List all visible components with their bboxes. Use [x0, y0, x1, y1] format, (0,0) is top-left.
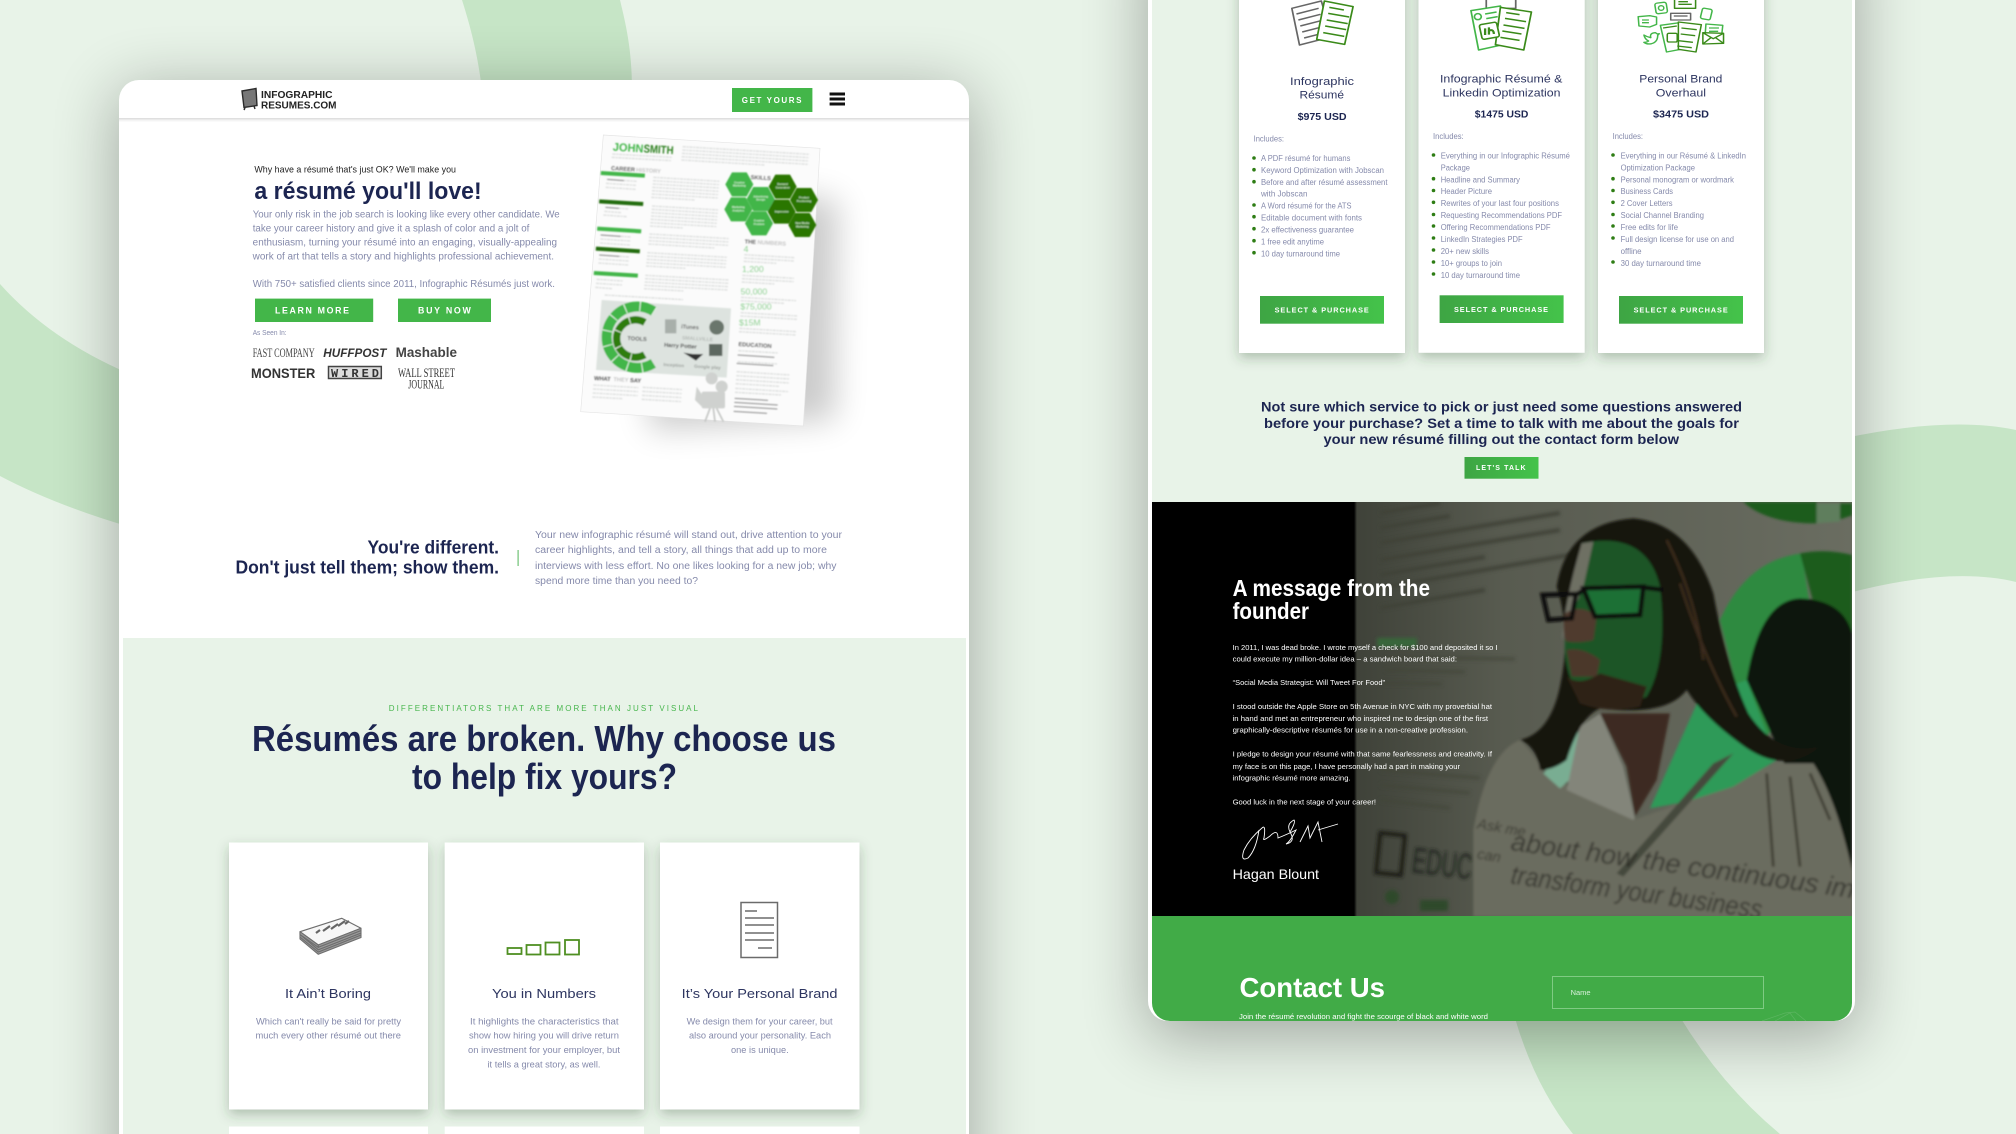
button: let's talk: [1464, 457, 1538, 479]
panel: why choose us section: [123, 638, 966, 1134]
features list: A PDF résumé for humans: [1261, 154, 1350, 163]
resume hexagon skills chart: [724, 172, 818, 237]
resume project logos: Google play: [694, 364, 721, 370]
heading: message from the founder: founder: [1233, 598, 1309, 624]
features list: Editable document with fonts: [1261, 214, 1362, 222]
as seen in logos: As Seen In:: [253, 330, 287, 337]
resume numbers: [739, 244, 772, 327]
signature: [1243, 820, 1338, 859]
input: name: [1552, 976, 1764, 1008]
resume hexagon skills chart: Positioning: [797, 199, 812, 203]
shirt lettering: can: [1476, 847, 1502, 866]
resume tools ring chart: TOOLS: [627, 336, 647, 343]
resume headings: CAREER: [611, 166, 635, 173]
features list: 10+ groups to join: [1441, 259, 1502, 268]
resume projects panel: [596, 300, 731, 378]
second row of cards: [229, 1126, 860, 1134]
features list: [1432, 152, 1570, 280]
founder name: Hagan Blount: [1233, 866, 1319, 882]
shirt lettering: about how the continuous im: [1509, 826, 1857, 904]
features list: Package: [1441, 164, 1470, 172]
resume hexagon skills chart: Impressive: [775, 210, 789, 214]
resume name: JOHN: [612, 142, 644, 156]
resume project logos: SMALLVILLE: [682, 335, 714, 343]
features list: Rewrites of your last four positions: [1441, 199, 1559, 208]
resume headings: SKILLS: [751, 175, 771, 182]
as seen in logos: FAST COMPANY: [253, 345, 315, 360]
input: name: Name: [1571, 990, 1591, 997]
resume shadow: [640, 180, 838, 430]
pricing card: personal brand overhaul: Personal Brand: [1639, 73, 1722, 85]
text: new infographic resume: interviews with less effort. No one likes looking for a new job; why: [535, 561, 836, 572]
resume hexagon skills chart: Demand: [777, 182, 788, 186]
resume project logos: Harry Potter: [664, 343, 698, 351]
features list: Offering Recommendations PDF: [1441, 223, 1551, 232]
resume headings: NUMBERS: [757, 240, 786, 248]
icon: resumes with linkedin: [1471, 0, 1531, 50]
panel: left website screenshot: [119, 80, 969, 1134]
card: you in numbers: You in Numbers: [492, 986, 597, 1001]
card: it's your personal brand: It’s Your Personal Brand: [682, 986, 838, 1001]
heading: contact us: Contact Us: [1240, 972, 1385, 1003]
pricing card: infographic resume: Includes:: [1254, 135, 1284, 144]
card: you in numbers: It highlights the characteristics that: [470, 1016, 619, 1026]
resume numbers: $15M: [739, 317, 761, 327]
resume numbers: 4: [744, 244, 749, 254]
features list: Headline and Summary: [1441, 176, 1520, 184]
card: it ain't boring: much every other résumé out there: [256, 1031, 401, 1041]
hero text: enthusiasm, turning your résumé into an engaging, visually-appealing: [253, 237, 557, 248]
icon: growing boxes: [508, 940, 579, 954]
panel: contact us: [1152, 916, 1852, 1021]
resume headings: HISTORY: [636, 168, 661, 175]
shadow on wall: [1746, 597, 1852, 868]
resume film camera: [695, 372, 728, 422]
features list: Before and after résumé assessment: [1261, 178, 1388, 187]
card: it's your personal brand: We design them for your career, but: [687, 1016, 833, 1026]
icon: logo document: [242, 88, 257, 110]
card: it's your personal brand: one is unique.: [731, 1045, 789, 1055]
heading: you're different: Don't just tell them; show them.: [236, 558, 499, 578]
founder photo: [1354, 502, 1857, 925]
card: it's your personal brand: [660, 842, 860, 1110]
features list: with Jobscan: [1260, 190, 1308, 198]
features list: Requesting Recommendations PDF: [1441, 211, 1562, 220]
pricing card: infographic resume and linkedin: Infographic Résumé &: [1440, 73, 1563, 85]
resume date bars: [594, 171, 645, 278]
button: [1260, 296, 1384, 324]
features list: 10 day turnaround time: [1261, 250, 1340, 258]
button: [1440, 295, 1564, 323]
features list: Everything in our Infographic Résumé: [1441, 152, 1570, 160]
logo: RESUMES.COM: [261, 101, 336, 112]
resume headings: THEY: [613, 377, 629, 384]
pricing card: infographic resume and linkedin: Linkedin Optimization: [1443, 87, 1560, 99]
pricing card: personal brand overhaul: $3475 USD: [1653, 108, 1709, 120]
resume hexagon skills chart: Creative: [754, 219, 765, 223]
resume numbers: 1,200: [742, 264, 764, 274]
resume hexagon skills chart: Marketing: [796, 224, 809, 228]
wall lettering: EDUC: [1410, 839, 1475, 887]
pricing card: personal brand overhaul: Overhaul: [1656, 87, 1706, 99]
features list: Keyword Optimization with Jobscan: [1261, 166, 1384, 175]
resume hexagon skills chart: New Media: [795, 221, 810, 225]
shirt lettering: Ask me: [1475, 816, 1527, 841]
button: get yours: [732, 88, 812, 112]
founder letter: [1233, 643, 1498, 807]
founder letter: infographic résumé more amazing.: [1233, 774, 1351, 783]
text: new infographic resume: Your new infographic résumé will stand out, drive attention to your: [535, 530, 843, 541]
resume hexagon skills chart: Marketing: [732, 205, 745, 209]
hero text: Your only risk in the job search is looking like every other candidate. We: [253, 210, 560, 220]
card: it ain't boring: [229, 842, 428, 1110]
founder letter: I pledge to design your résumé with that same fearlessness and creativity. If: [1233, 750, 1493, 759]
button: learn more: [255, 299, 373, 322]
features list: Everything in our Résumé & LinkedIn: [1621, 152, 1746, 160]
button: get yours: GET YOURS: [742, 96, 802, 105]
founder letter: “Social Media Strategist: Will Tweet For Food”: [1233, 678, 1386, 687]
contact intro text: Join the résumé revolution and fight the scourge of black and white word: [1239, 1012, 1488, 1021]
resume name: [612, 142, 674, 157]
resume headings: EDUCATION: [738, 342, 772, 350]
button: buy now: BUY NOW: [418, 306, 471, 316]
icon: social media bundle: [1638, 0, 1724, 52]
faint mountain mark: [1762, 1012, 1806, 1021]
features list: 20+ new skills: [1441, 247, 1489, 256]
as seen in logos: [251, 330, 457, 392]
features list: A Word résumé for the ATS: [1261, 202, 1352, 210]
button: SELECT & PURCHASE: [1454, 305, 1548, 314]
resume tools ring chart: [607, 307, 654, 368]
features list: Social Channel Branding: [1621, 211, 1704, 220]
features list: Optimization Package: [1621, 164, 1695, 172]
resume numbers: 50,000: [741, 286, 767, 296]
resume headings: WHAT: [594, 376, 611, 383]
hero text: take your career history and give it a splash of color and a jolt of: [253, 223, 530, 234]
heading: not sure which service: Not sure which service to pick or just need some questions answered: [1261, 399, 1742, 415]
pricing card: infographic resume: Infographic: [1290, 76, 1355, 88]
resume hexagon skills chart: Design: [756, 198, 765, 202]
card: it ain't boring: It Ain’t Boring: [285, 986, 371, 1001]
heading: resumes are broken: to help fix yours?: [412, 756, 677, 797]
as seen in logos: WIRED: [331, 367, 379, 381]
features list: 2 Cover Letters: [1621, 199, 1673, 208]
heading: resumes are broken: [252, 718, 836, 797]
wall lettering: [1372, 502, 1568, 912]
button: [1619, 296, 1743, 324]
resume headings: PROJECTS: [666, 311, 697, 319]
resume numbers: $75,000: [740, 302, 772, 312]
features list: Header Picture: [1441, 187, 1492, 196]
hair: [1520, 518, 1820, 770]
as seen in logos: Mashable: [396, 344, 457, 360]
card: you in numbers: it tells a great story, as well.: [488, 1059, 600, 1069]
heading: not sure which service: [1261, 399, 1742, 447]
hero text: Why have a résumé that's just OK? We'll make you: [254, 164, 456, 174]
text: new infographic resume: [535, 530, 843, 587]
hero text: With 750+ satisfied clients since 2011, Infographic Résumés just work.: [253, 279, 555, 290]
panel: founder message: [1152, 502, 1857, 925]
heading: resumes are broken: Résumés are broken. Why choose us: [252, 718, 836, 759]
features list: 10 day turnaround time: [1441, 271, 1520, 280]
features list: LinkedIn Strategies PDF: [1441, 235, 1523, 244]
button: SELECT & PURCHASE: [1634, 305, 1728, 314]
shirt: [1473, 740, 1852, 917]
resume hexagon skills chart: Advertising: [753, 194, 768, 198]
text: new infographic resume: career highlights, and tell a story, all things that add up to more: [535, 545, 827, 556]
founder letter: in hand and met an entrepreneur who inspired me to design one of the first: [1233, 714, 1488, 723]
founder letter: In 2011, I was dead broke. I wrote myself a check for $100 and deposited it so I: [1233, 643, 1498, 652]
founder letter: my face is on this page, I have personally had a part in making your: [1233, 762, 1461, 771]
as seen in logos: MONSTER: [251, 365, 315, 381]
as seen in logos: WALL STREET: [398, 365, 455, 380]
pricing card: personal brand overhaul: Includes:: [1613, 132, 1643, 141]
logo: [242, 88, 336, 112]
features list: [1252, 154, 1388, 258]
pricing card: infographic resume: [1239, 0, 1405, 353]
resume paper: [581, 135, 820, 426]
card: you in numbers: show how hiring you will drive return: [469, 1031, 619, 1041]
pricing card: personal brand overhaul: [1598, 0, 1764, 353]
logo: INFOGRAPHIC: [261, 90, 332, 101]
resume text lines: [592, 147, 809, 402]
button: SELECT & PURCHASE: [1275, 305, 1369, 314]
heading: you're different: [236, 538, 499, 578]
features list: 30 day turnaround time: [1621, 259, 1701, 268]
heading: message from the founder: [1232, 579, 1430, 619]
resume project logos: iTunes: [681, 324, 699, 331]
resume project logos: Inception: [663, 362, 684, 368]
pricing card: infographic resume and linkedin: [1418, 0, 1585, 353]
pricing card: infographic resume and linkedin: Includes:: [1433, 132, 1464, 141]
heading: message from the founder: A message from the: [1233, 575, 1430, 601]
resume hexagon skills chart: Analytics: [732, 208, 745, 212]
icon: resume stack: [300, 918, 361, 954]
eyebrow: DIFFERENTIATORS THAT ARE MORE THAN JUST VISUAL: [389, 704, 699, 713]
button: buy now: [398, 299, 491, 322]
card: it ain't boring: Which can't really be said for pretty: [256, 1016, 402, 1026]
text: new infographic resume: spend more time than you need to?: [535, 576, 698, 587]
resume name: SMITH: [643, 143, 674, 157]
differentiator intro: [236, 530, 843, 587]
heading: not sure which service: before your purchase? Set a time to talk with me about the goals for: [1264, 415, 1740, 431]
glasses: [1543, 587, 1663, 620]
features list: Business Cards: [1621, 187, 1673, 196]
heading: you're different: You're different.: [368, 538, 499, 558]
founder letter: I stood outside the Apple Store on 5th Avenue in NYC with my proverbial hat: [1233, 702, 1492, 711]
button: learn more: LEARN MORE: [275, 306, 349, 316]
features list: Full design license for use on and: [1621, 235, 1734, 244]
resume hexagon skills chart: Marketing: [733, 184, 746, 188]
heading: not sure which service: your new résumé filling out the contact form below: [1324, 431, 1679, 447]
features list: 2x effectiveness guarantee: [1261, 226, 1354, 234]
resume project logos: [663, 319, 724, 370]
resume hexagon skills chart: Generation: [776, 185, 790, 189]
features list: [1611, 152, 1746, 268]
features list: 1 free edit anytime: [1261, 238, 1324, 246]
hero text: a résumé you'll love!: [254, 178, 482, 205]
hero text: [252, 164, 560, 290]
founder letter: Good luck in the next stage of your career!: [1233, 798, 1376, 807]
shirt lettering: transform your business: [1509, 860, 1764, 925]
card: it's your personal brand: also around your personality. Each: [689, 1031, 831, 1041]
features list: offline: [1621, 247, 1642, 256]
icon: hamburger menu: [830, 92, 845, 106]
resume hexagon skills chart: Problem: [754, 222, 765, 226]
resume headings: THE: [745, 239, 756, 246]
pricing card: infographic resume: Résumé: [1300, 90, 1344, 102]
icon: two resumes: [1292, 1, 1353, 45]
face: [1565, 541, 1662, 705]
resume hexagon skills chart: Product: [799, 196, 809, 200]
panel: right website screenshot: [1148, 0, 1857, 1021]
pricing card: infographic resume and linkedin: $1475 USD: [1475, 108, 1529, 120]
features list: Personal monogram or wordmark: [1621, 176, 1734, 184]
icon: document: [741, 902, 778, 958]
hero text: work of art that tells a story and highlights professional achievement.: [252, 251, 554, 262]
card: you in numbers: [445, 842, 644, 1110]
resume headings: [594, 166, 786, 385]
resume headings: SAY: [630, 378, 642, 385]
founder letter: could execute my million-dollar idea – a sandwich board that said:: [1233, 655, 1457, 664]
sample resume illustration: [581, 135, 838, 430]
as seen in logos: JOURNAL: [408, 377, 444, 392]
card: you in numbers: on investment for your employer, but: [468, 1045, 621, 1055]
as seen in logos: HUFFPOST: [323, 348, 387, 360]
pricing card: infographic resume: $975 USD: [1298, 111, 1347, 123]
features list: Free edits for life: [1621, 223, 1678, 232]
button: let's talk: LET'S TALK: [1476, 465, 1526, 472]
founder letter: graphically-descriptive résumés for use in a non-creative profession.: [1233, 726, 1468, 735]
resume hexagon skills chart: Creative: [734, 180, 745, 184]
wall graphics: green discs: [1743, 502, 1817, 523]
